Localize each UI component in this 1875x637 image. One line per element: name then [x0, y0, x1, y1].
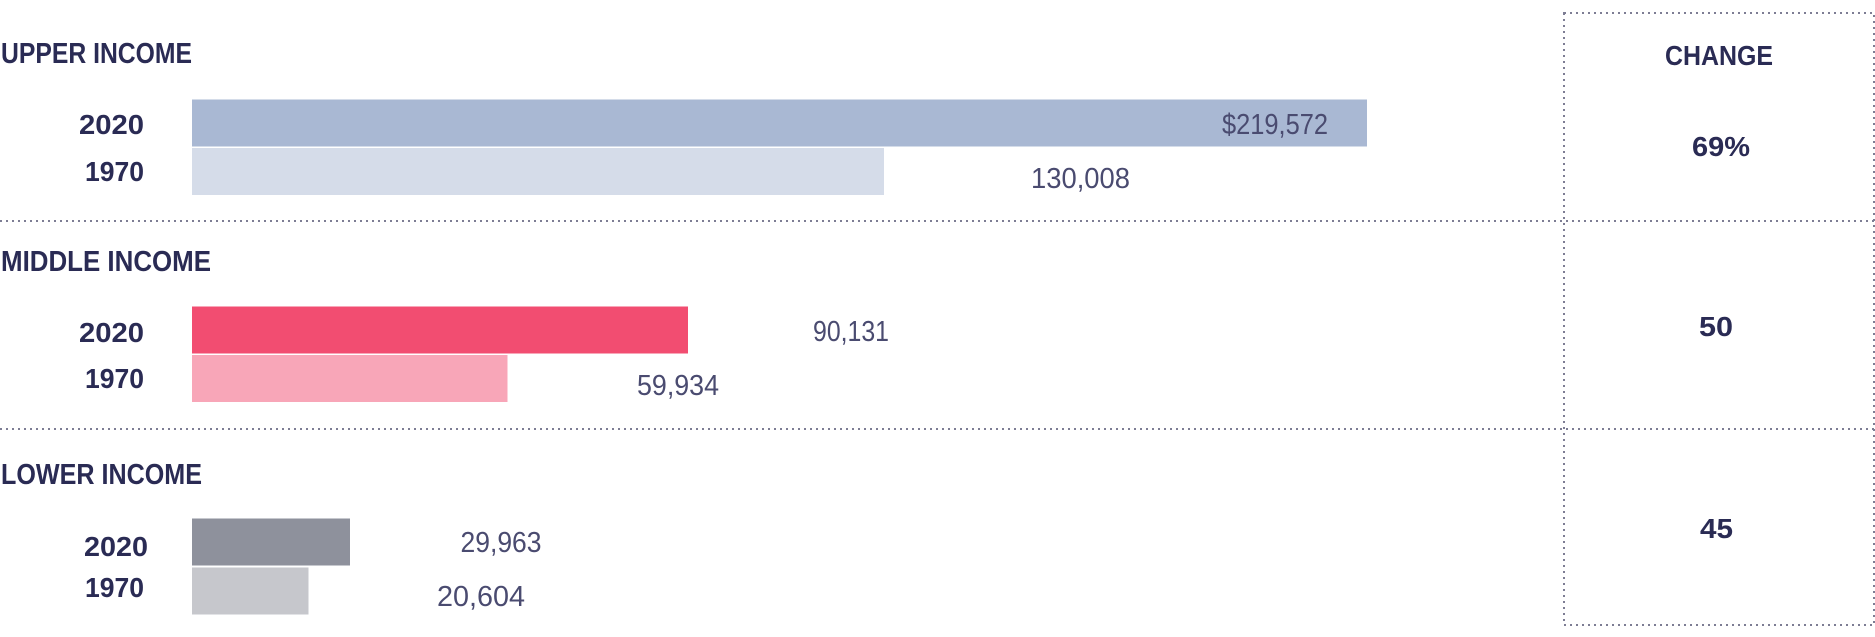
year label: upper 2020: 2020	[79, 109, 144, 140]
heading: upper income: UPPER INCOME	[1, 38, 192, 70]
panel: lower income	[1, 459, 542, 614]
panel: change column	[1665, 40, 1773, 544]
value: middle 2020: 90,131	[813, 316, 889, 348]
year label: middle 2020: 2020	[79, 317, 144, 348]
bar: lower 1970	[192, 568, 308, 614]
bar: upper 1970	[192, 148, 884, 195]
value: lower 1970: 20,604	[437, 581, 525, 613]
value: lower 2020: 29,963	[460, 527, 542, 559]
heading: lower income: LOWER INCOME	[1, 459, 202, 491]
bar: lower 2020	[192, 518, 350, 566]
heading: change: CHANGE	[1665, 40, 1773, 71]
year label: middle 1970: 1970	[85, 363, 144, 394]
value: upper 2020: $219,572	[1222, 109, 1328, 141]
change value: middle income: 50	[1699, 311, 1733, 342]
bar: middle 2020	[192, 306, 688, 354]
change value: upper income: 69%	[1692, 131, 1750, 162]
panel: upper income	[1, 38, 1367, 195]
year label: lower 1970: 1970	[85, 572, 144, 603]
panel: middle income	[1, 246, 889, 402]
change value: lower income: 45	[1700, 513, 1733, 544]
year label: lower 2020: 2020	[84, 531, 148, 562]
value: middle 1970: 59,934	[637, 370, 719, 402]
bar: middle 1970	[192, 355, 508, 402]
year label: upper 1970: 1970	[85, 156, 144, 187]
heading: middle income: MIDDLE INCOME	[1, 246, 211, 278]
bar: upper 2020	[192, 100, 1367, 146]
value: upper 1970: 130,008	[1031, 163, 1130, 195]
